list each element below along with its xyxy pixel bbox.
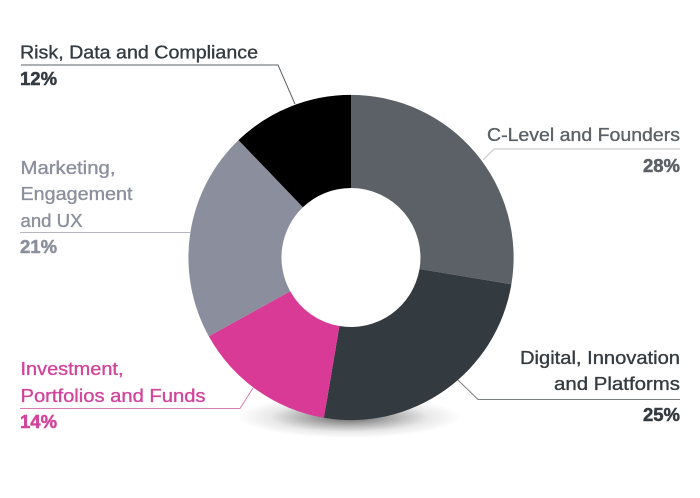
label: Marketing, Engagement and UX: and UX: [20, 210, 82, 231]
label: C-Level and Founders: C-Level and Founders: [487, 124, 680, 145]
label: Marketing, Engagement and UX: Engagement: [20, 183, 132, 204]
label: Risk, Data and Compliance: [20, 42, 295, 104]
donut chart: [188, 95, 514, 420]
label: Digital, Innovation and Platforms: and Platforms: [554, 373, 680, 394]
label: Digital, Innovation and Platforms: 25%: [643, 404, 680, 425]
label: Marketing, Engagement and UX: [20, 157, 191, 257]
donut shadow: [237, 396, 461, 438]
label: Investment, Portfolios and Funds: Investment,: [20, 358, 123, 379]
label: Digital, Innovation and Platforms: Digital, Innovation: [520, 347, 680, 368]
segment: C-Level and Founders: [351, 95, 514, 284]
label: C-Level and Founders: [483, 124, 680, 176]
label: Investment, Portfolios and Funds: Portfolios and Funds: [20, 385, 206, 406]
label: Risk, Data and Compliance: Risk, Data and Compliance: [20, 42, 258, 62]
segment: Risk, Data and Compliance: [238, 95, 351, 207]
label: Marketing, Engagement and UX: 21%: [20, 236, 57, 257]
segment: Digital, Innovation and Platforms: [324, 269, 511, 420]
label: Investment, Portfolios and Funds: [20, 358, 253, 432]
segment: Marketing, Engagement and UX: [188, 140, 303, 336]
label: Risk, Data and Compliance: 12%: [20, 68, 57, 89]
label: C-Level and Founders: 28%: [643, 155, 680, 176]
label: Investment, Portfolios and Funds: 14%: [20, 411, 57, 432]
segment: Investment, Portfolios and Funds: [209, 291, 339, 418]
label: Digital, Innovation and Platforms: [458, 347, 680, 425]
label: Marketing, Engagement and UX: Marketing,: [20, 157, 116, 178]
